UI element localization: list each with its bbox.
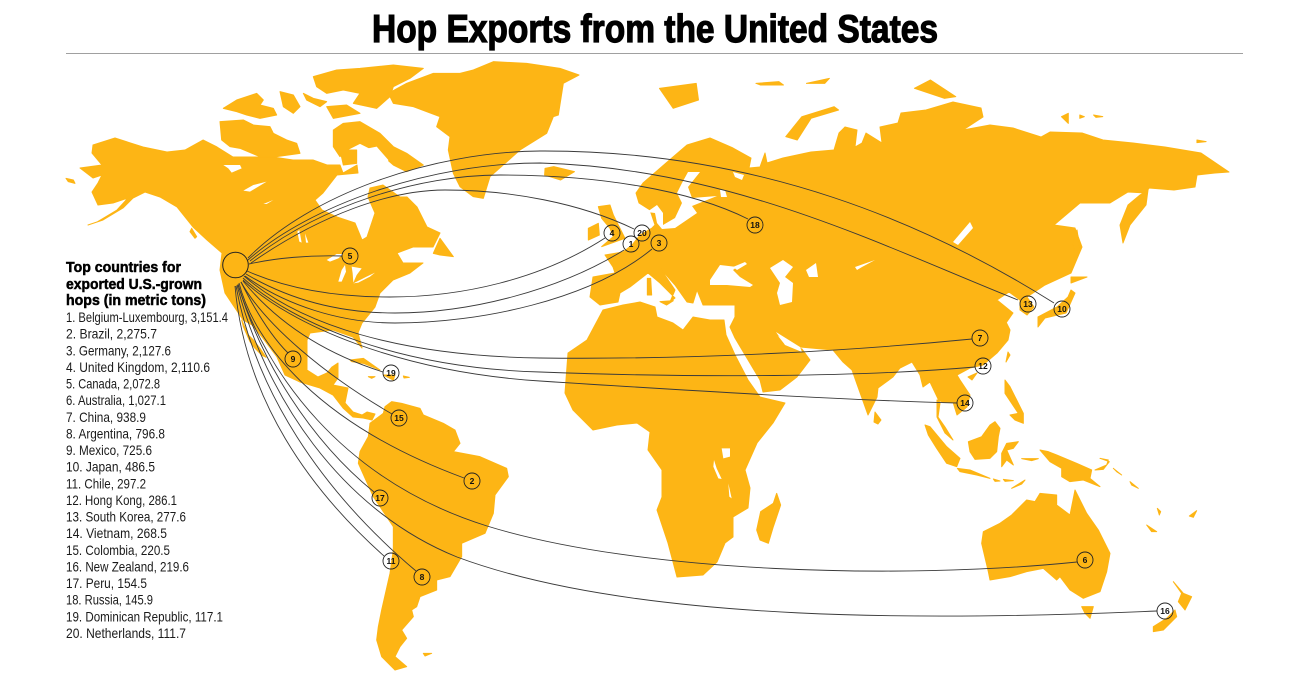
export routes	[235, 151, 1157, 616]
country markers: 12	[978, 361, 988, 371]
country markers: 5	[348, 251, 353, 261]
legend list: 18. Russia, 145.9	[66, 592, 153, 608]
country markers: 1	[629, 239, 634, 249]
country markers: 2	[470, 476, 475, 486]
South America, Madagascar	[358, 402, 781, 670]
legend list	[66, 309, 228, 641]
legend heading: Top countries for	[66, 260, 181, 276]
origin circle	[223, 252, 248, 278]
Kamchatka, Sakhalin, Japan and East Asian islands	[1120, 190, 1148, 243]
country markers: 16	[1160, 606, 1170, 616]
Caribbean and Baja California	[242, 320, 409, 380]
legend list: 20. Netherlands, 111.7	[66, 625, 186, 641]
Southeast Asia and Oceania	[925, 380, 1197, 632]
country markers: 18	[750, 220, 760, 230]
legend heading: hops (in metric tons)	[66, 293, 206, 309]
legend heading	[66, 260, 206, 309]
legend list: 12. Hong Kong, 286.1	[66, 492, 177, 508]
Africa	[565, 302, 785, 577]
country markers	[285, 217, 1173, 619]
country markers: 14	[960, 398, 970, 408]
lakes and inland seas	[710, 265, 753, 287]
country markers: 19	[386, 368, 396, 378]
Arctic Eurasian islands	[545, 78, 1206, 180]
country markers: 4	[610, 228, 615, 238]
country markers: 20	[637, 228, 647, 238]
legend list: 17. Peru, 154.5	[66, 575, 147, 591]
legend list: 3. Germany, 2,127.6	[66, 342, 171, 358]
legend heading: exported U.S.-grown	[66, 277, 202, 293]
legend list: 6. Australia, 1,027.1	[66, 392, 166, 408]
legend list: 14. Vietnam, 268.5	[66, 525, 167, 541]
legend list: 15. Colombia, 220.5	[66, 542, 170, 558]
Arctic islands and Greenland	[66, 62, 579, 257]
North America	[80, 138, 440, 420]
country markers: 3	[657, 238, 662, 248]
legend list: 1. Belgium-Luxembourg, 3,151.4	[66, 309, 228, 325]
country markers: 7	[978, 333, 983, 343]
legend list: 10. Japan, 486.5	[66, 459, 155, 475]
country markers: 17	[375, 493, 385, 503]
country markers: 6	[1083, 555, 1088, 565]
legend list: 13. South Korea, 277.6	[66, 509, 186, 525]
legend list: 8. Argentina, 796.8	[66, 425, 165, 441]
country markers: 8	[420, 572, 425, 582]
legend list: 7. China, 938.9	[66, 409, 146, 425]
legend list: 5. Canada, 2,072.8	[66, 376, 160, 392]
title: Hop Exports from the United States	[372, 8, 938, 51]
legend list: 16. New Zealand, 219.6	[66, 558, 189, 574]
country markers: 9	[291, 354, 296, 364]
legend list: 19. Dominican Republic, 117.1	[66, 608, 223, 624]
country markers: 15	[394, 413, 404, 423]
legend list: 2. Brazil, 2,275.7	[66, 326, 157, 342]
legend list: 9. Mexico, 725.6	[66, 442, 152, 458]
legend list: 4. United Kingdom, 2,110.6	[66, 359, 210, 375]
legend list: 11. Chile, 297.2	[66, 475, 146, 491]
country markers: 10	[1057, 304, 1067, 314]
country markers: 11	[386, 556, 396, 566]
country markers: 13	[1023, 299, 1033, 309]
Eurasia	[590, 102, 1229, 440]
UK, Ireland, Iceland and European islands	[588, 205, 673, 305]
